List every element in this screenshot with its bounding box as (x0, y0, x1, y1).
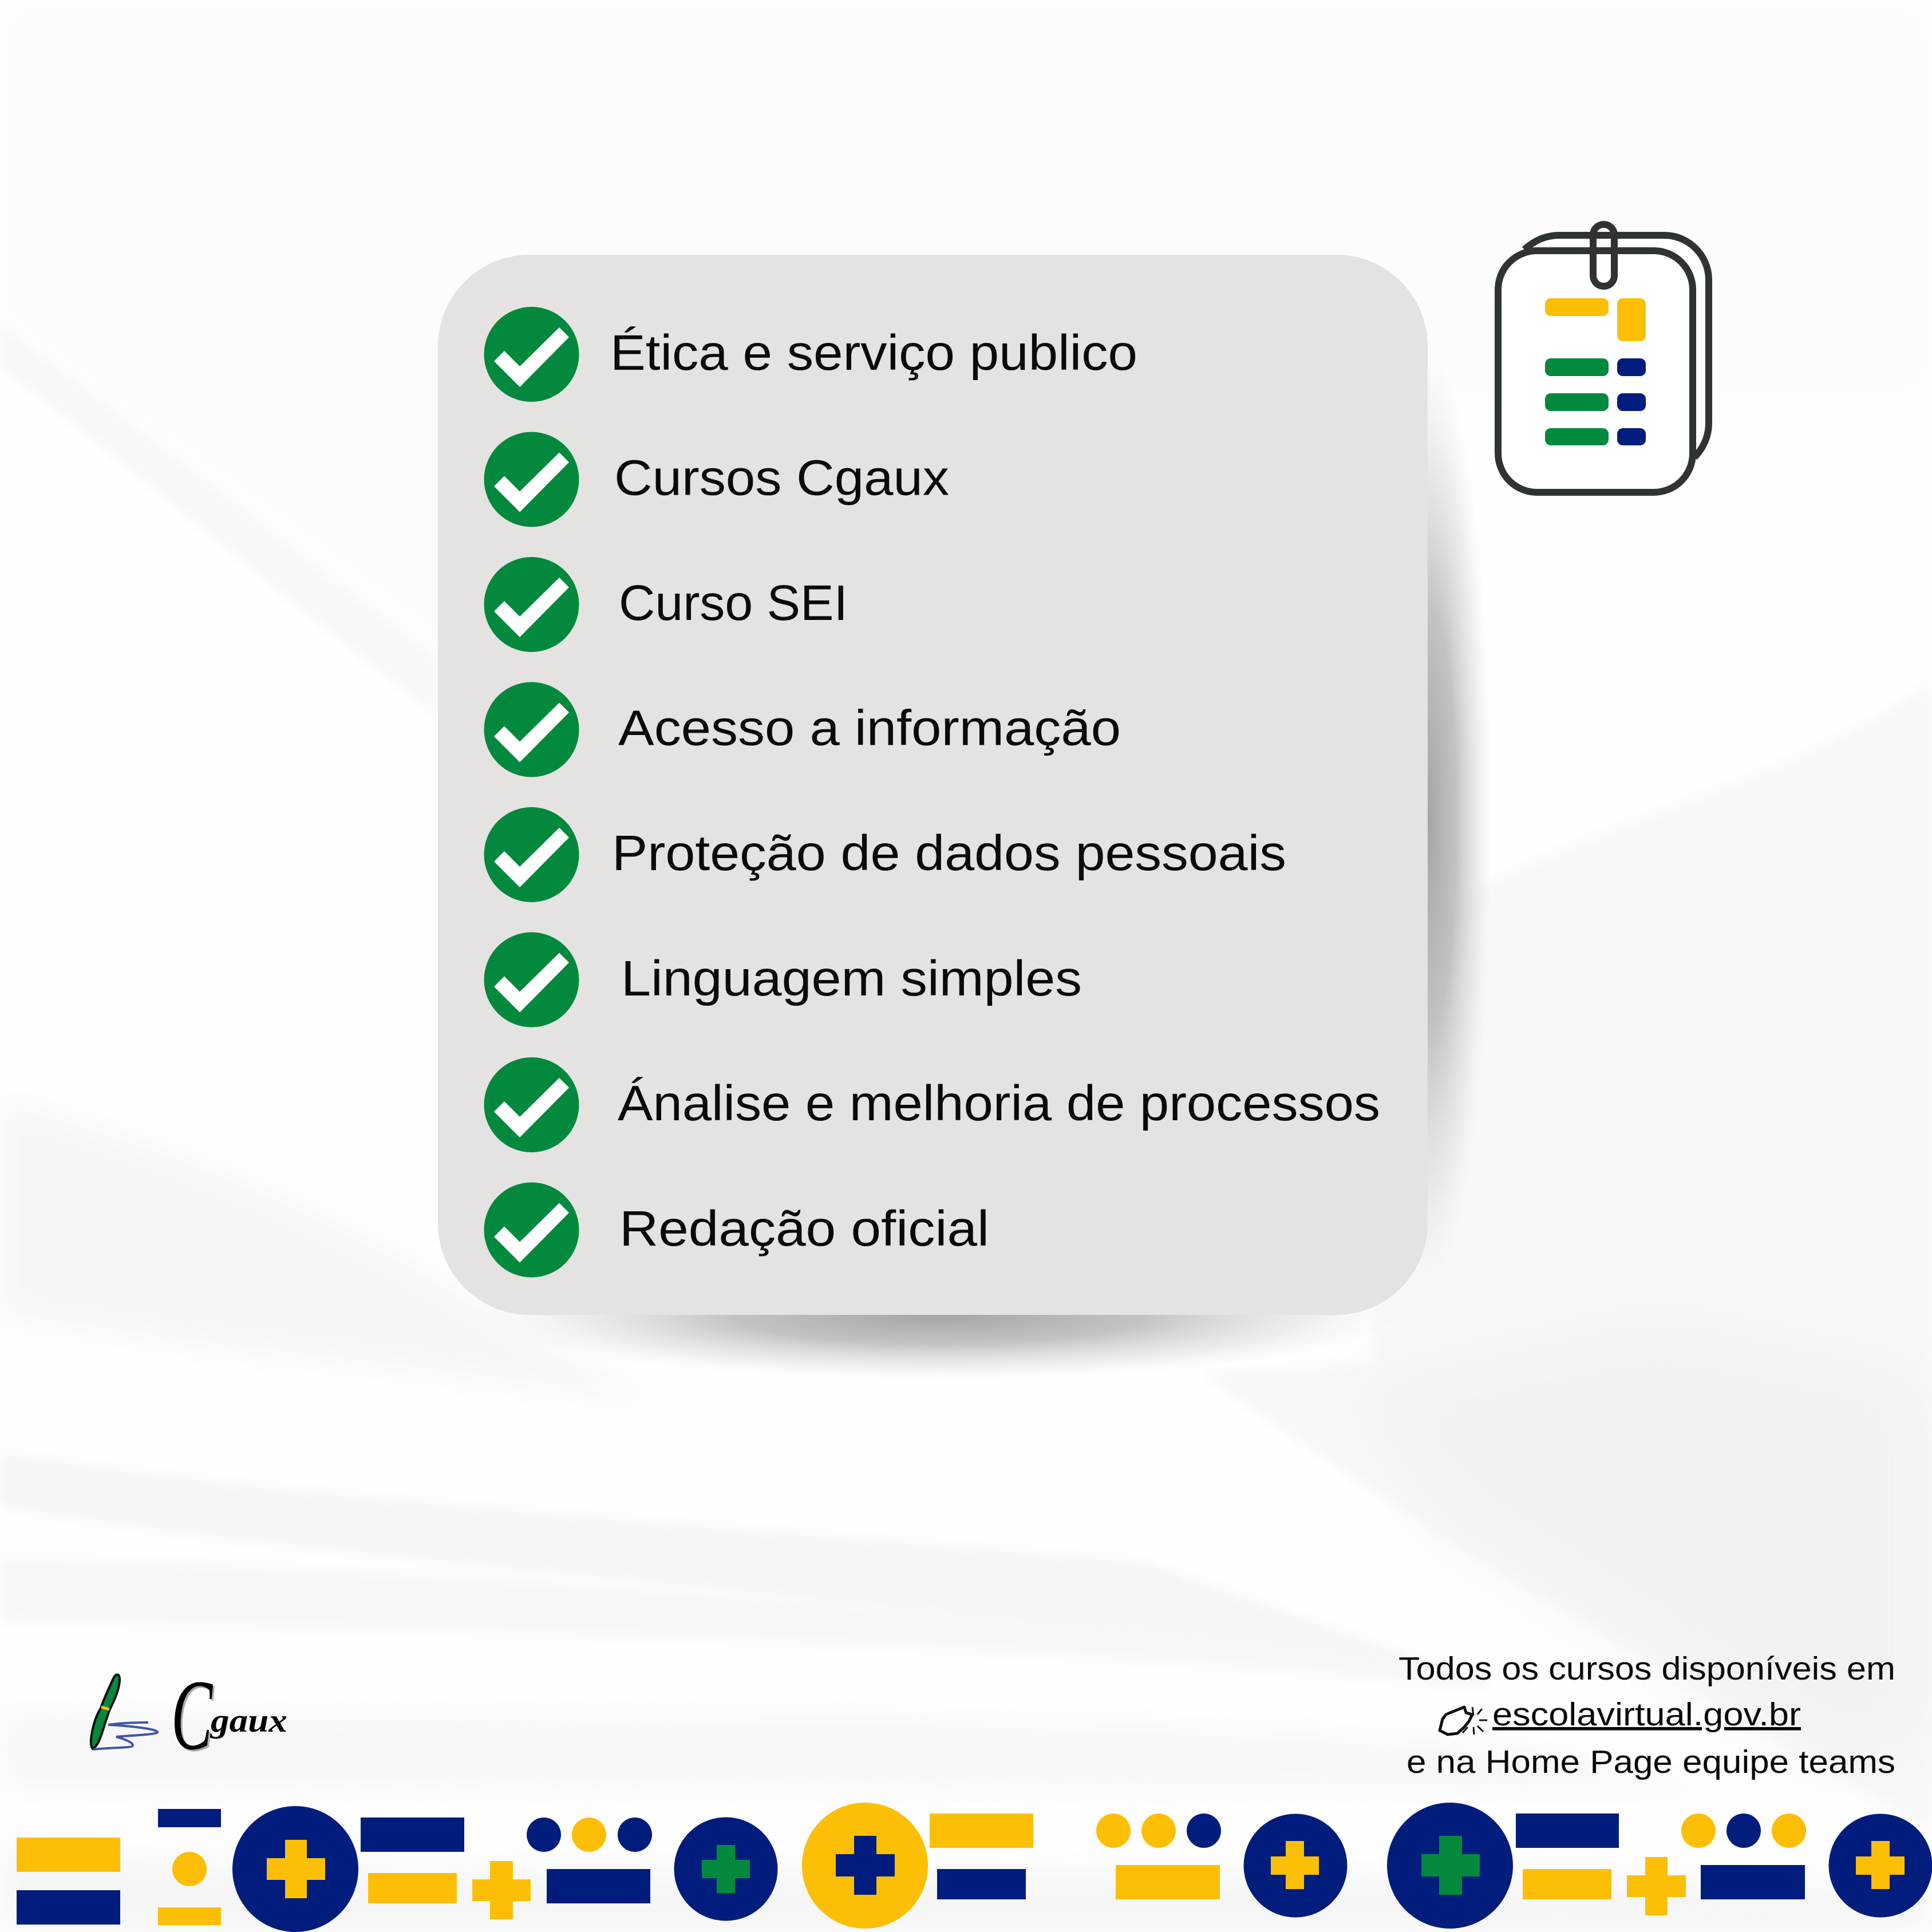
footer text: where to find the courses: Todos os cursos disponíveis em (1398, 1650, 1895, 1687)
item: Redação oficial (484, 1183, 989, 1278)
item: Linguagem simples: Linguagem simples (621, 951, 1082, 1006)
link: escolavirtual.gov.br: escolavirtual.gov.br (1492, 1696, 1801, 1733)
decorative strip: Brazilian-coloured geometric shapes (17, 1803, 1932, 1932)
item: Curso SEI: Curso SEI (619, 575, 848, 631)
item: Redação oficial: Redação oficial (619, 1201, 989, 1257)
wordmark: Cgaux (171, 1660, 287, 1771)
icon: pen signing (91, 1674, 157, 1749)
card shadow (481, 349, 1492, 1379)
item: Ética e serviço publico: Ética e serviço publico (610, 325, 1137, 381)
footer text: where to find the courses: e na Home Page equipe teams (1406, 1744, 1895, 1780)
icon: clicking hand (1440, 1707, 1487, 1735)
wordmark: Cgaux: C (171, 1660, 214, 1771)
panel: course checklist (438, 255, 1428, 1315)
item: Cursos Cgaux: Cursos Cgaux (614, 450, 949, 506)
item: Ánalise e melhoria de processos: Ánalise e melhoria de processos (618, 1076, 1380, 1131)
item: Proteção de dados pessoais (484, 807, 1286, 902)
footer text: where to find the courses (1398, 1650, 1895, 1780)
item: Curso SEI (484, 557, 848, 652)
item: Acesso a informação: Acesso a informação (618, 701, 1121, 756)
icon: clipboard with coloured list (1498, 224, 1709, 492)
item: Ánalise e melhoria de processos (484, 1057, 1380, 1152)
item: Cursos Cgaux (484, 432, 949, 527)
logo: Cgaux pen and signature (91, 1660, 287, 1773)
item: Linguagem simples (484, 932, 1082, 1027)
item: Ética e serviço publico (484, 307, 1137, 402)
item: Acesso a informação (484, 682, 1121, 777)
wordmark shadow: C (173, 1661, 215, 1773)
item: Proteção de dados pessoais: Proteção de dados pessoais (612, 825, 1286, 881)
wordmark: Cgaux: gaux (210, 1702, 287, 1739)
